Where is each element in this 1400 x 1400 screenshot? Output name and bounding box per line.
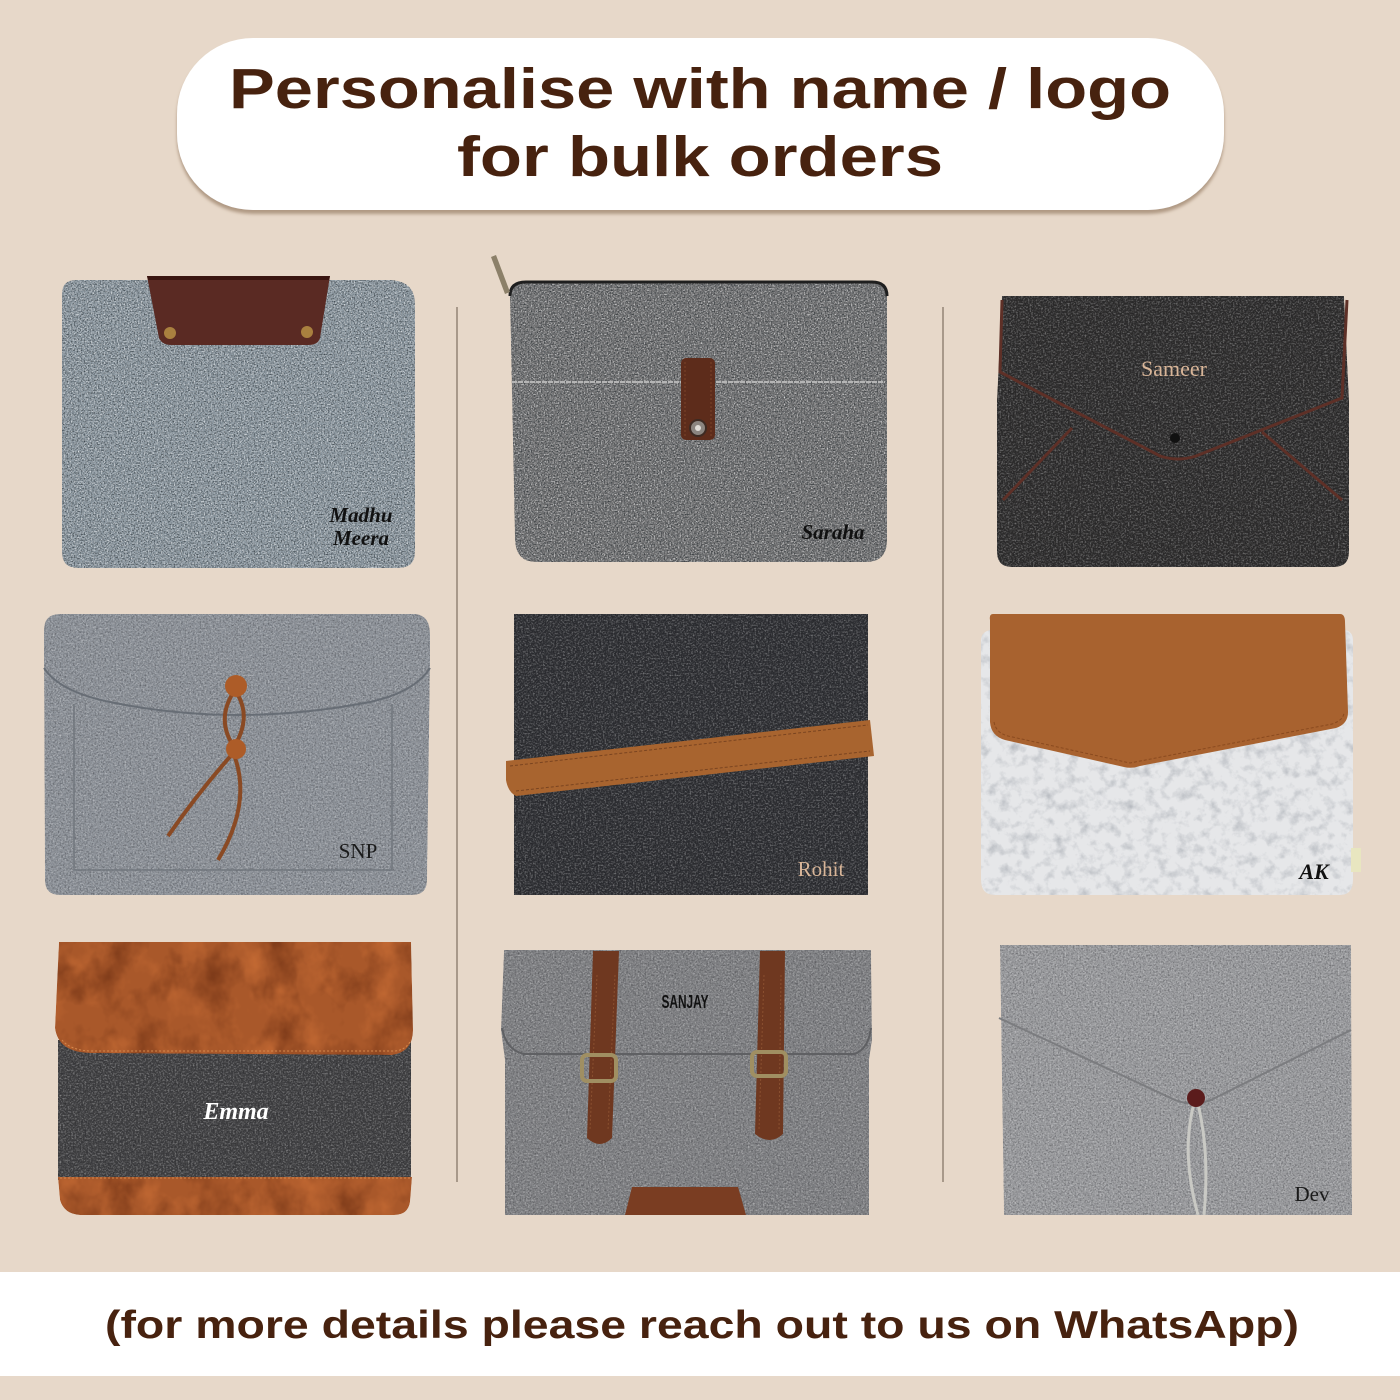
rivets <box>164 327 176 339</box>
sleeve: AK <box>981 614 1361 895</box>
leather tab <box>147 276 330 345</box>
envelope flap <box>999 1018 1351 1104</box>
sleeve: Emma <box>55 942 413 1215</box>
sleeve: Madhu Meera: Meera <box>332 526 389 550</box>
cord <box>1188 1100 1206 1215</box>
bottom patch <box>625 1187 746 1215</box>
diagonal leather band <box>506 720 874 796</box>
buckles <box>582 1055 616 1081</box>
zip pull <box>491 255 510 294</box>
felt body <box>58 1040 411 1180</box>
sleeve: Saraha <box>491 255 887 562</box>
leather flap <box>990 614 1348 768</box>
name: Dev <box>1294 1182 1330 1206</box>
footer band <box>0 1272 1400 1376</box>
name: Sameer <box>1141 356 1208 381</box>
sleeve: SNP <box>44 614 430 895</box>
flap edge <box>502 1028 871 1054</box>
title second line: for bulk orders <box>457 125 943 189</box>
title banner <box>177 38 1224 210</box>
sleeve: Dev <box>999 945 1352 1215</box>
name: Madhu <box>328 503 393 527</box>
top leather flap <box>55 942 413 1055</box>
envelope flap <box>1000 300 1347 459</box>
name: Saraha <box>801 520 865 544</box>
sleeve: SANJAY <box>501 950 872 1215</box>
name: Emma <box>202 1099 269 1125</box>
bottom leather band <box>58 1177 412 1215</box>
sleeve: Madhu Meera <box>62 276 415 568</box>
pocket seam <box>74 704 392 870</box>
strap <box>681 358 715 440</box>
buttons <box>225 675 247 697</box>
name: AK <box>1297 859 1330 884</box>
footer text: (for more details please reach out to us on WhatsApp) <box>105 1304 1299 1347</box>
name: SNP <box>339 839 377 863</box>
snap <box>1170 433 1180 443</box>
flap edge <box>44 668 430 715</box>
straps <box>587 951 619 1144</box>
sleeve: Sameer <box>997 296 1349 567</box>
name: SANJAY <box>662 992 708 1012</box>
cord <box>168 690 244 860</box>
pocket seam <box>512 381 885 383</box>
name: Rohit <box>798 857 844 881</box>
sleeve: Rohit <box>506 614 874 895</box>
title: Personalise with name / logo <box>229 57 1171 121</box>
button <box>1187 1089 1205 1107</box>
column divider right <box>942 307 944 1182</box>
tag <box>1351 848 1361 872</box>
column divider left <box>456 307 458 1182</box>
